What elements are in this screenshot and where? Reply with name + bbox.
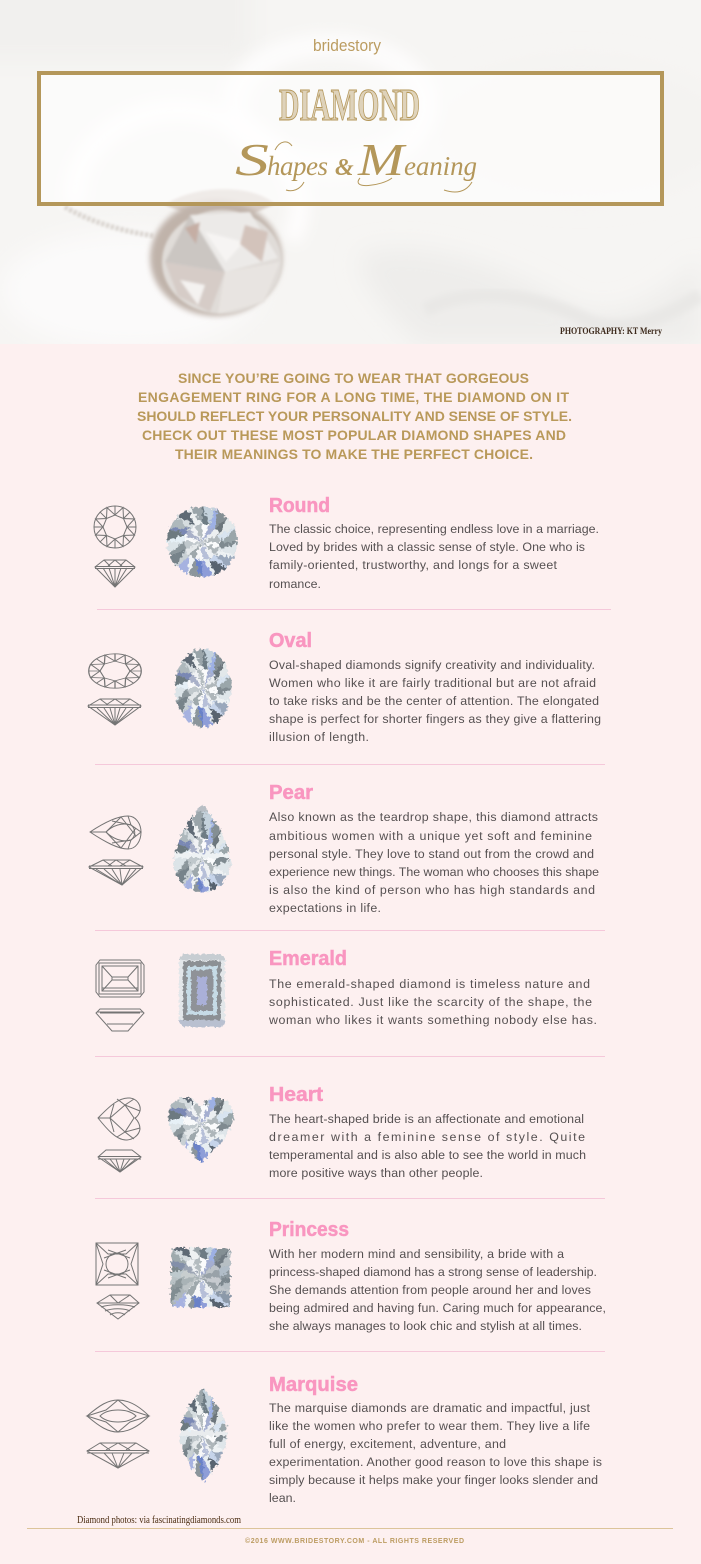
section: emerald <box>96 948 597 1031</box>
text: emerald: The emerald-shaped diamond is timeless nature and <box>269 977 590 991</box>
text: marquise <box>269 1401 602 1505</box>
text: emerald: woman who likes it wants something nobody else has. <box>268 1013 597 1027</box>
text: princess: princess-shaped diamond has a strong sense of leadership. <box>269 1265 597 1279</box>
text: round: family-oriented, trustworthy, and longs for a sweet <box>269 558 558 572</box>
text: pear: ambitious women with a unique yet soft and feminine <box>269 829 592 843</box>
text: oval: Women who like it are fairly traditional but are not afraid <box>269 676 596 690</box>
text: heart: The heart-shaped bride is an affectionate and emotional <box>269 1112 584 1126</box>
text: heart: temperamental and is also able to see the world in much <box>269 1148 586 1162</box>
text: marquise: lean. <box>269 1491 296 1505</box>
heading: round: Round <box>269 495 330 517</box>
text: marquise: The marquise diamonds are dramatic and impactful, just <box>269 1401 591 1415</box>
line drawing: round <box>94 506 136 587</box>
text: princess: being admired and having fun. Caring much for appearance, <box>269 1301 606 1315</box>
photo: emerald diamond <box>179 954 225 1027</box>
heading: princess: Princess <box>269 1219 349 1241</box>
title: Shapes & Meaning: S <box>235 134 269 185</box>
text: princess: She demands attention from people around her and loves <box>269 1283 591 1297</box>
text: heart <box>269 1112 586 1180</box>
title: Shapes & Meaning: & <box>335 155 354 181</box>
text: oval: Oval-shaped diamonds signify creativity and individuality. <box>269 658 595 672</box>
title: Shapes & Meaning: eaning <box>404 151 477 181</box>
title: Shapes & Meaning: M <box>357 134 407 185</box>
text: oval <box>269 658 601 744</box>
intro text: CHECK OUT THESE MOST POPULAR DIAMOND SHAPES AND <box>142 427 566 443</box>
section: pear <box>89 782 599 915</box>
text: marquise: experimentation. Another good reason to love this shape is <box>269 1455 602 1469</box>
text: princess <box>269 1247 606 1333</box>
text: oval: illusion of length. <box>269 730 369 744</box>
text: heart: dreamer with a feminine sense of style. Quite <box>269 1130 585 1144</box>
text: round: Loved by brides with a classic sense of style. One who is <box>269 540 585 554</box>
text: princess: With her modern mind and sensibility, a bride with a <box>269 1247 564 1261</box>
photo: heart diamond <box>168 1096 234 1163</box>
line drawing: heart <box>98 1098 141 1172</box>
text: emerald: sophisticated. Just like the scarcity of the shape, the <box>269 995 592 1009</box>
hero photo: engagement ring <box>0 0 701 350</box>
section: princess <box>96 1219 606 1333</box>
photo: oval diamond <box>174 648 232 728</box>
title: Shapes & Meaning: hapes <box>267 151 328 181</box>
text: princess: she always manages to look chic and stylish at all times. <box>269 1319 582 1333</box>
heading: oval: Oval <box>269 630 312 652</box>
section: heart <box>97 1086 586 1180</box>
photo: round diamond <box>166 506 238 578</box>
text: marquise: like the women who prefer to wear them. They live a life <box>269 1419 590 1433</box>
text: pear: experience new things. The woman who chooses this shape <box>269 865 599 879</box>
text: heart: more positive ways than other people. <box>269 1166 483 1180</box>
section: oval <box>88 630 601 744</box>
line drawing: princess <box>96 1243 139 1319</box>
footer copyright: ©2016 WWW.BRIDESTORY.COM - ALL RIGHTS RESERVED <box>245 1537 464 1545</box>
section: marquise <box>87 1374 602 1505</box>
intro text: SINCE YOU’RE GOING TO WEAR THAT GORGEOUS <box>178 370 529 386</box>
title: Shapes & Meaning <box>235 134 477 192</box>
intro text: SHOULD REFLECT YOUR PERSONALITY AND SENSE OF STYLE. <box>137 408 572 424</box>
heading: heart: Heart <box>269 1084 323 1106</box>
text: marquise: full of energy, excitement, adventure, and <box>269 1437 506 1451</box>
text: oval: to take risks and be the center of attention. The elongated <box>269 694 599 708</box>
title frame <box>39 73 662 204</box>
photo: princess diamond <box>168 1246 232 1309</box>
line drawing: pear <box>89 816 143 885</box>
diamond photo credit: Diamond photos: via fascinatingdiamonds.com <box>77 1515 241 1526</box>
heading: emerald: Emerald <box>269 948 347 970</box>
line drawing: emerald <box>96 960 144 1031</box>
photo: pear diamond <box>172 804 232 892</box>
text: pear: personal style. They love to stand out from the crowd and <box>269 847 594 861</box>
intro text: THEIR MEANINGS TO MAKE THE PERFECT CHOICE. <box>175 446 533 462</box>
text: pear: Also known as the teardrop shape, this diamond attracts <box>269 810 598 824</box>
heading: pear: Pear <box>269 782 313 804</box>
text: pear: is also the kind of person who has high standards and <box>269 883 595 897</box>
text: pear: expectations in life. <box>269 901 381 915</box>
title: Diamond: DIAMOND <box>279 79 420 130</box>
photo credit: PHOTOGRAPHY: KT Merry <box>560 326 662 336</box>
intro text: ENGAGEMENT RING FOR A LONG TIME, THE DIAMOND ON IT <box>138 389 569 405</box>
text: round: romance. <box>269 577 321 591</box>
photo: marquise diamond <box>179 1388 228 1483</box>
text: marquise: simply because it helps make your finger looks slender and <box>269 1473 598 1487</box>
line drawing: marquise <box>87 1400 149 1468</box>
bridestory logo: bridestory <box>313 36 381 55</box>
text: oval: shape is perfect for shorter fingers as they give a flattering <box>269 712 601 726</box>
text: pear <box>269 810 599 915</box>
text: emerald <box>268 977 597 1027</box>
section: round <box>94 495 599 591</box>
text: round <box>269 522 599 591</box>
line drawing: oval <box>88 654 141 725</box>
text: round: The classic choice, representing endless love in a marriage. <box>269 522 599 536</box>
heading: marquise: Marquise <box>269 1374 358 1396</box>
intro text <box>137 370 572 462</box>
